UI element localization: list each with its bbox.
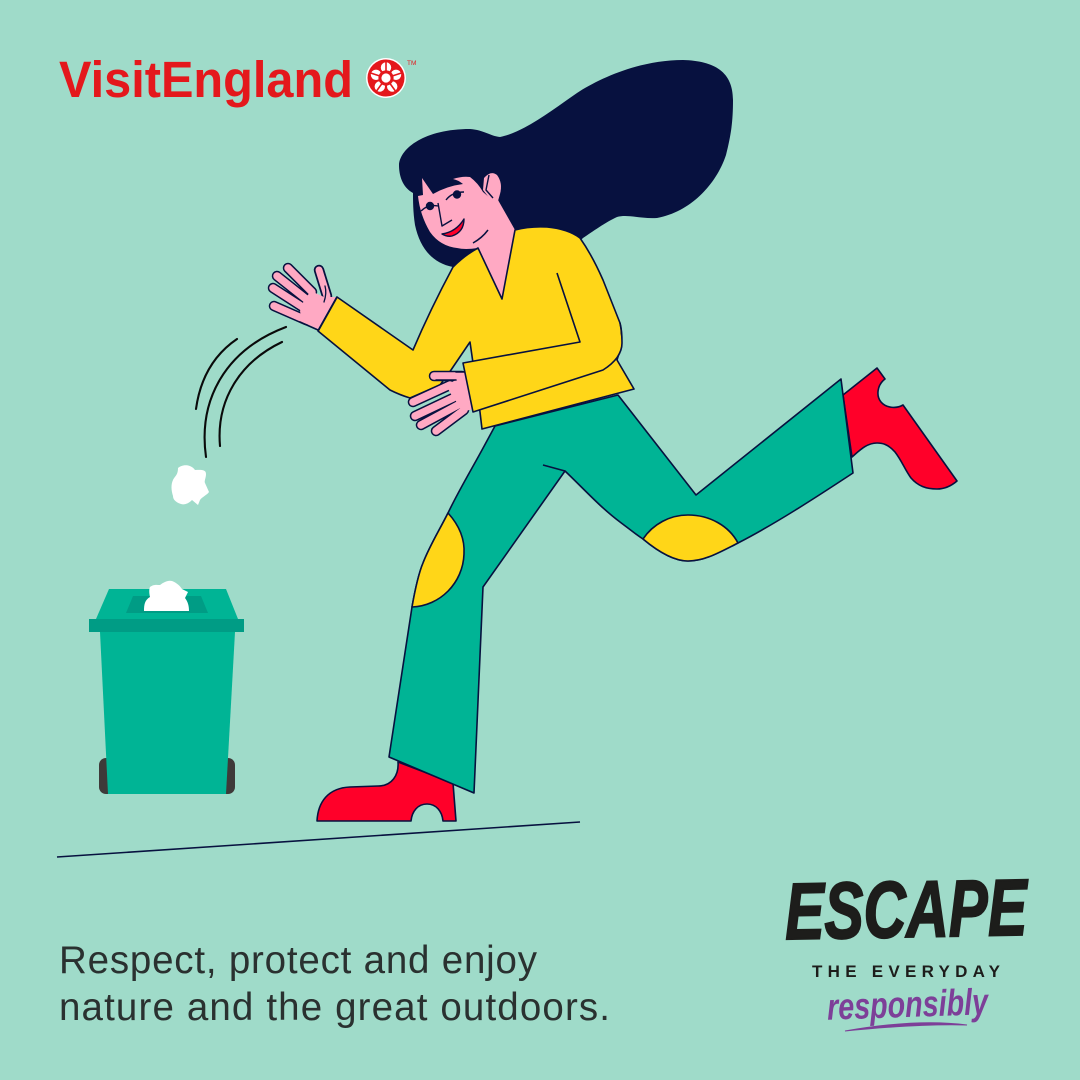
- trademark: TM: [407, 60, 416, 67]
- back shoe: [843, 368, 957, 489]
- jumper sleeve fill: [463, 330, 622, 412]
- icon: tudor rose: [366, 58, 406, 98]
- waste bin: [89, 581, 244, 794]
- face and neck: [418, 177, 515, 299]
- jumper sleeve outline: [463, 273, 622, 412]
- bin lid: [96, 589, 238, 619]
- logo wordmark: VisitEngland: [59, 51, 353, 108]
- eyes: [421, 190, 464, 211]
- jumper: [318, 227, 634, 429]
- ear line: [486, 175, 493, 198]
- message line 2: nature and the great outdoors.: [59, 986, 610, 1029]
- hair: [399, 60, 733, 300]
- message text: [59, 939, 610, 1029]
- brush underline: [845, 1023, 967, 1031]
- raised sleeve cuff: [318, 297, 337, 331]
- front shoe: [317, 762, 456, 821]
- ground line: [57, 822, 580, 857]
- campaign logo: [784, 863, 1030, 1031]
- mouth: [442, 219, 464, 236]
- bin slot: [126, 596, 208, 613]
- logo: VisitEngland: [59, 51, 416, 108]
- hand: raised: [273, 268, 336, 330]
- campaign word: responsibly: responsibly: [826, 981, 991, 1028]
- message line 1: Respect, protect and enjoy: [59, 939, 538, 982]
- campaign line: THE EVERYDAY: THE EVERYDAY: [812, 962, 1001, 981]
- bin rim: [89, 619, 244, 632]
- jaw line: [473, 230, 488, 243]
- trouser crease: [543, 465, 565, 471]
- bin wheels: [99, 758, 235, 794]
- bin body: [100, 632, 235, 794]
- patch: front knee: [412, 513, 464, 607]
- patch: back knee: [643, 515, 738, 561]
- illustration: running woman: [273, 60, 957, 821]
- trousers: [389, 379, 853, 793]
- icon: paper ball: [172, 465, 209, 505]
- hand: lower: [413, 372, 473, 431]
- nose: [438, 203, 452, 226]
- motion lines: [196, 327, 286, 457]
- paper in bin: [144, 581, 189, 611]
- ear: [483, 173, 501, 201]
